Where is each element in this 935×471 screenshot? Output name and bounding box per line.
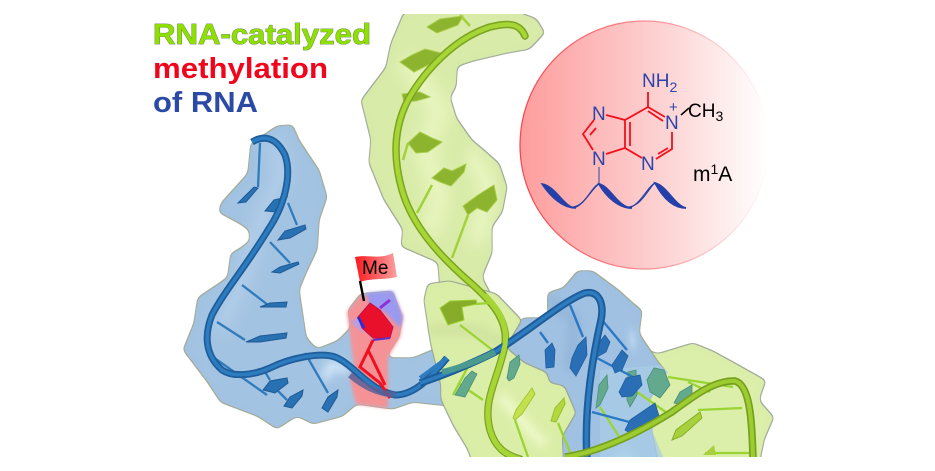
green surface: upper RNA strand (360, 8, 546, 300)
blue surface: left RNA strand (182, 124, 460, 430)
green surface: lower right lobe (650, 343, 774, 457)
flag: methyl label (355, 253, 397, 301)
atom labels: + (669, 99, 678, 116)
atom labels: N (592, 149, 606, 170)
red highlighted nucleotide surface (347, 291, 403, 408)
green bases: upper strand (400, 15, 497, 258)
blue tint where right surface meets right green lobe (600, 365, 668, 457)
atom labels: NH (642, 71, 669, 92)
blue backbone continuing over the methyl site (350, 375, 395, 395)
panel: m1A chemical structure circle (520, 21, 768, 269)
title: RNA-catalyzed methylation of RNA: RNA-catalyzed (153, 19, 371, 51)
icon: RNA strand ribbon (542, 183, 686, 208)
panel: m1A chemical structure circle: CH (688, 101, 715, 122)
blue backbone: left strand (207, 138, 447, 395)
atom labels: N (592, 104, 606, 125)
atom labels: N (641, 154, 655, 175)
teal bases: green seen through blue surface (455, 355, 692, 408)
atom labels (592, 71, 679, 175)
atom labels: 2 (669, 79, 677, 95)
structure bonds (583, 92, 672, 159)
green backbone: upper strand (396, 24, 525, 459)
molecular illustration (182, 8, 775, 471)
green surface: central lobe over blue (423, 280, 577, 471)
title: RNA-catalyzed methylation of RNA (153, 19, 371, 119)
panel: m1A chemical structure circle: 3 (715, 108, 723, 124)
blue backbone and bases: right strand (420, 293, 659, 459)
title: RNA-catalyzed methylation of RNA: methylation (153, 53, 328, 85)
title: RNA-catalyzed methylation of RNA: of RNA (153, 87, 258, 119)
methylated adenosine stick model (358, 300, 393, 398)
label: m1A: 1 (710, 161, 718, 177)
atom labels: N (665, 113, 679, 134)
label: m1A: m (693, 163, 710, 186)
green backbone: lower right strand (565, 381, 753, 459)
green backbone redrawn in front of right strand (485, 295, 520, 459)
green bases: lower region (440, 300, 752, 457)
blue strand seen through green lobe: teal segment (442, 352, 495, 372)
blue surface: right RNA strand (508, 270, 666, 457)
label: m1A: A (718, 163, 732, 186)
flag: methyl label: Me (362, 258, 388, 279)
blue bases and ladders: left strand (213, 143, 338, 412)
